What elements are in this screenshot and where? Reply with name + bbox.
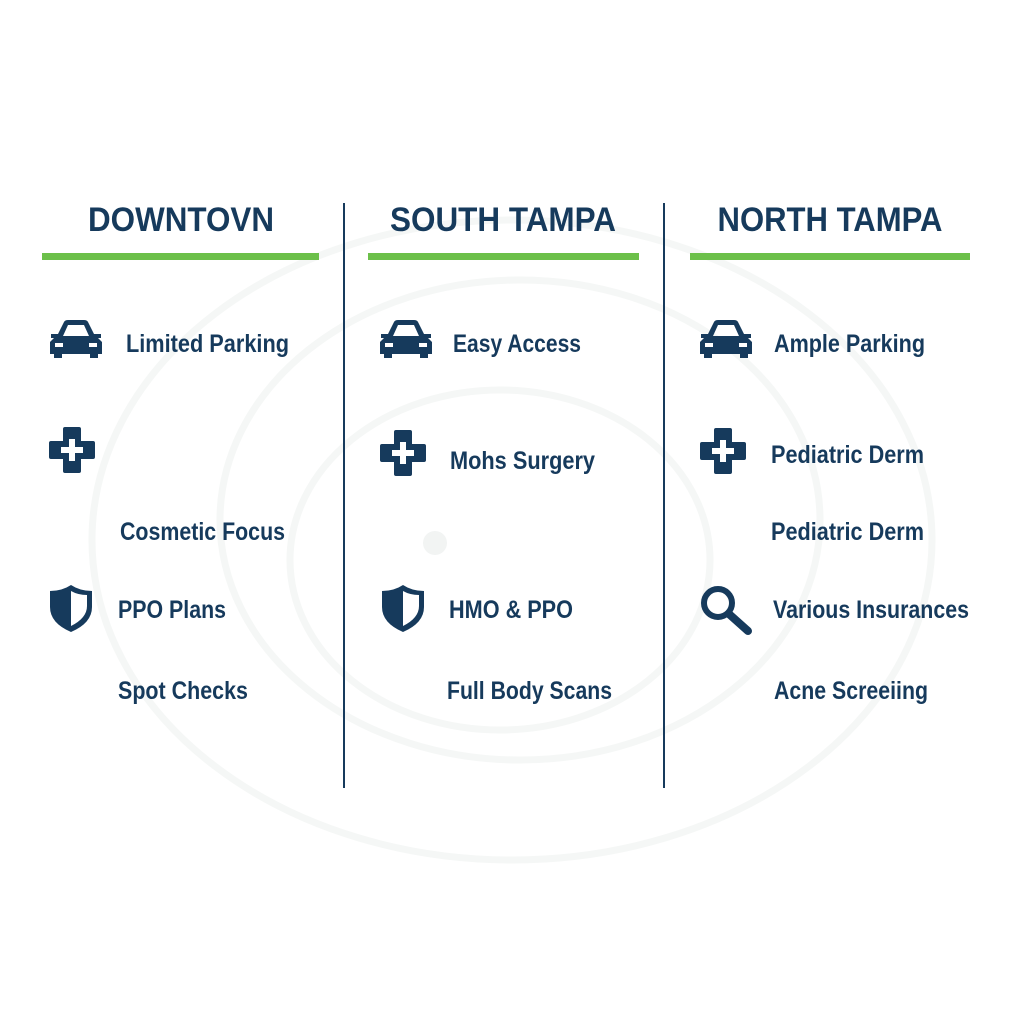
text: mohs surgery: Mohs Surgery	[450, 447, 595, 475]
heading: NORTH TAMPA: NORTH TAMPA	[718, 201, 942, 239]
icon: car	[380, 320, 432, 358]
text: ppo plans: PPO Plans	[118, 596, 226, 624]
icon: cross	[700, 428, 746, 474]
icon: cross	[49, 427, 95, 473]
heading: SOUTH TAMPA: SOUTH TAMPA	[390, 201, 616, 239]
column: downtown	[42, 201, 319, 705]
icon: shield	[50, 585, 92, 632]
text: spot checks: Spot Checks	[118, 677, 248, 705]
background swirl decoration	[92, 220, 932, 860]
heading: DOWNTOVN: DOWNTOVN	[88, 201, 274, 239]
text: cosmetic focus: Cosmetic Focus	[120, 518, 285, 546]
text: easy access: Easy Access	[453, 330, 581, 358]
column: north tampa	[690, 201, 970, 705]
icon: car	[700, 320, 752, 358]
text: various insurances: Various Insurances	[773, 596, 969, 624]
icon: car	[50, 320, 102, 358]
text: hmo & ppo: HMO & PPO	[449, 596, 573, 624]
icon: magnifier	[704, 589, 748, 631]
icon: shield	[382, 585, 424, 632]
text: pediatric derm: Pediatric Derm	[771, 441, 924, 469]
divider lines	[344, 203, 664, 788]
text: pediatric derm 2: Pediatric Derm	[771, 518, 924, 546]
icon: cross	[380, 430, 426, 476]
text: acne screeiing: Acne Screeiing	[774, 677, 928, 705]
text: ample parking: Ample Parking	[774, 330, 925, 358]
text: full body scans: Full Body Scans	[447, 677, 612, 705]
column: south tampa	[368, 201, 639, 705]
text: limited parking: Limited Parking	[126, 330, 289, 358]
